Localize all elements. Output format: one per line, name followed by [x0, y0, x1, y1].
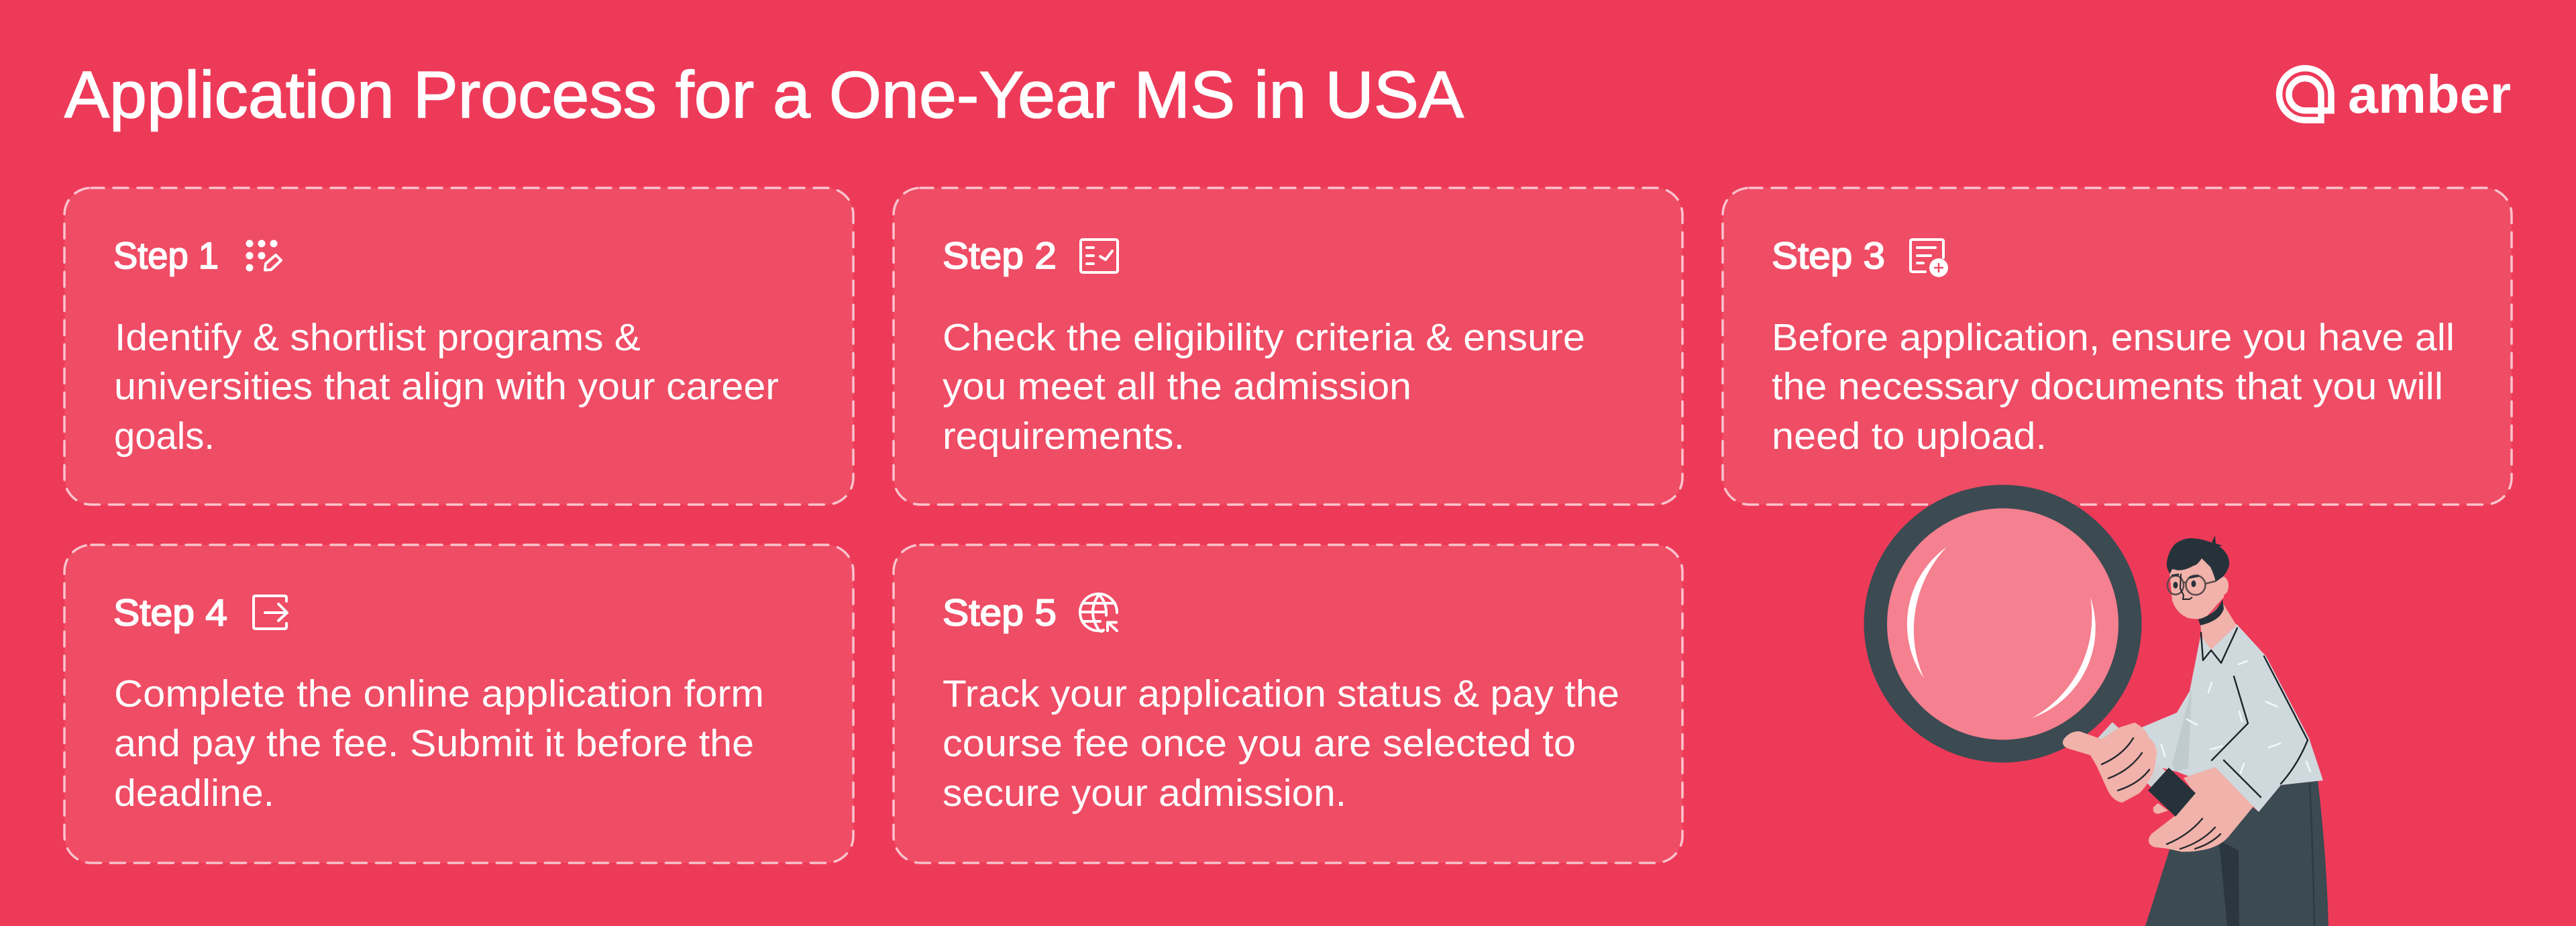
logo wordmark: amber — [2348, 64, 2511, 124]
text block: step 5 description — [943, 672, 1619, 815]
text block: step 1 description: universities that align with your career — [114, 365, 779, 408]
icon: checklist — [1081, 240, 1118, 272]
heading: step 1: Step 1 — [113, 234, 219, 276]
text block: step 1 description: Identify & shortlist programs & — [115, 316, 641, 359]
panel: step 4 — [64, 545, 853, 863]
panel: step 5 — [894, 545, 1682, 863]
text block: step 5 description: Track your application status & pay the — [943, 672, 1619, 715]
fingertip behind grip — [2153, 803, 2168, 814]
shirt collar — [2201, 628, 2237, 663]
card background — [64, 545, 853, 863]
illustration: person with magnifying glass — [1864, 484, 2328, 926]
text block: step 2 description: Check the eligibility criteria & ensure — [943, 316, 1585, 359]
left hand — [2065, 725, 2155, 801]
neck — [2200, 603, 2237, 650]
trousers — [2145, 780, 2328, 926]
heading: step 5: Step 5 — [943, 591, 1057, 633]
magnifier grip — [2148, 768, 2196, 817]
text block: step 2 description — [943, 316, 1585, 458]
head — [2167, 535, 2229, 625]
text block: step 1 description: goals. — [114, 415, 215, 458]
shirt — [2135, 624, 2323, 812]
text block: step 2 description: requirements. — [943, 415, 1185, 458]
text block: step 4 description: and pay the fee. Submit it before the — [114, 722, 754, 765]
magnifying glass — [1864, 484, 2163, 784]
icon: document with plus — [1911, 240, 1948, 277]
text block: step 5 description: secure your admission. — [943, 772, 1346, 815]
icon: dots and pencil — [246, 240, 281, 271]
card background — [64, 188, 853, 505]
icon: globe with cursor — [1080, 594, 1117, 631]
icon: exit arrow — [254, 596, 287, 629]
card background — [1723, 188, 2512, 505]
text block: step 2 description: you meet all the admission — [943, 365, 1411, 408]
card background — [894, 545, 1682, 863]
heading: step 4: Step 4 — [113, 591, 227, 633]
text block: step 3 description: the necessary documents that you will — [1772, 365, 2443, 408]
text block: step 5 description: course fee once you are selected to — [943, 722, 1576, 765]
text block: step 1 description — [114, 316, 779, 458]
heading: step 3: Step 3 — [1772, 234, 1885, 276]
heading: step 2: Step 2 — [943, 234, 1057, 276]
panel: step 3 — [1723, 188, 2512, 505]
card background — [894, 188, 1682, 505]
logo mark — [2279, 68, 2331, 120]
panel: step 1 — [64, 188, 853, 505]
text block: step 4 description: Complete the online application form — [114, 672, 764, 715]
right hand — [2149, 768, 2252, 851]
panel: step 2 — [894, 188, 1682, 505]
text block: step 3 description: Before application, ensure you have all — [1772, 316, 2455, 359]
title: Application Process for a One-Year MS in USA — [64, 58, 1464, 132]
text block: step 4 description — [114, 672, 764, 815]
text block: step 3 description — [1772, 316, 2455, 458]
logo: amber — [2279, 64, 2511, 124]
text block: step 3 description: need to upload. — [1772, 415, 2047, 458]
text block: step 4 description: deadline. — [114, 772, 274, 815]
